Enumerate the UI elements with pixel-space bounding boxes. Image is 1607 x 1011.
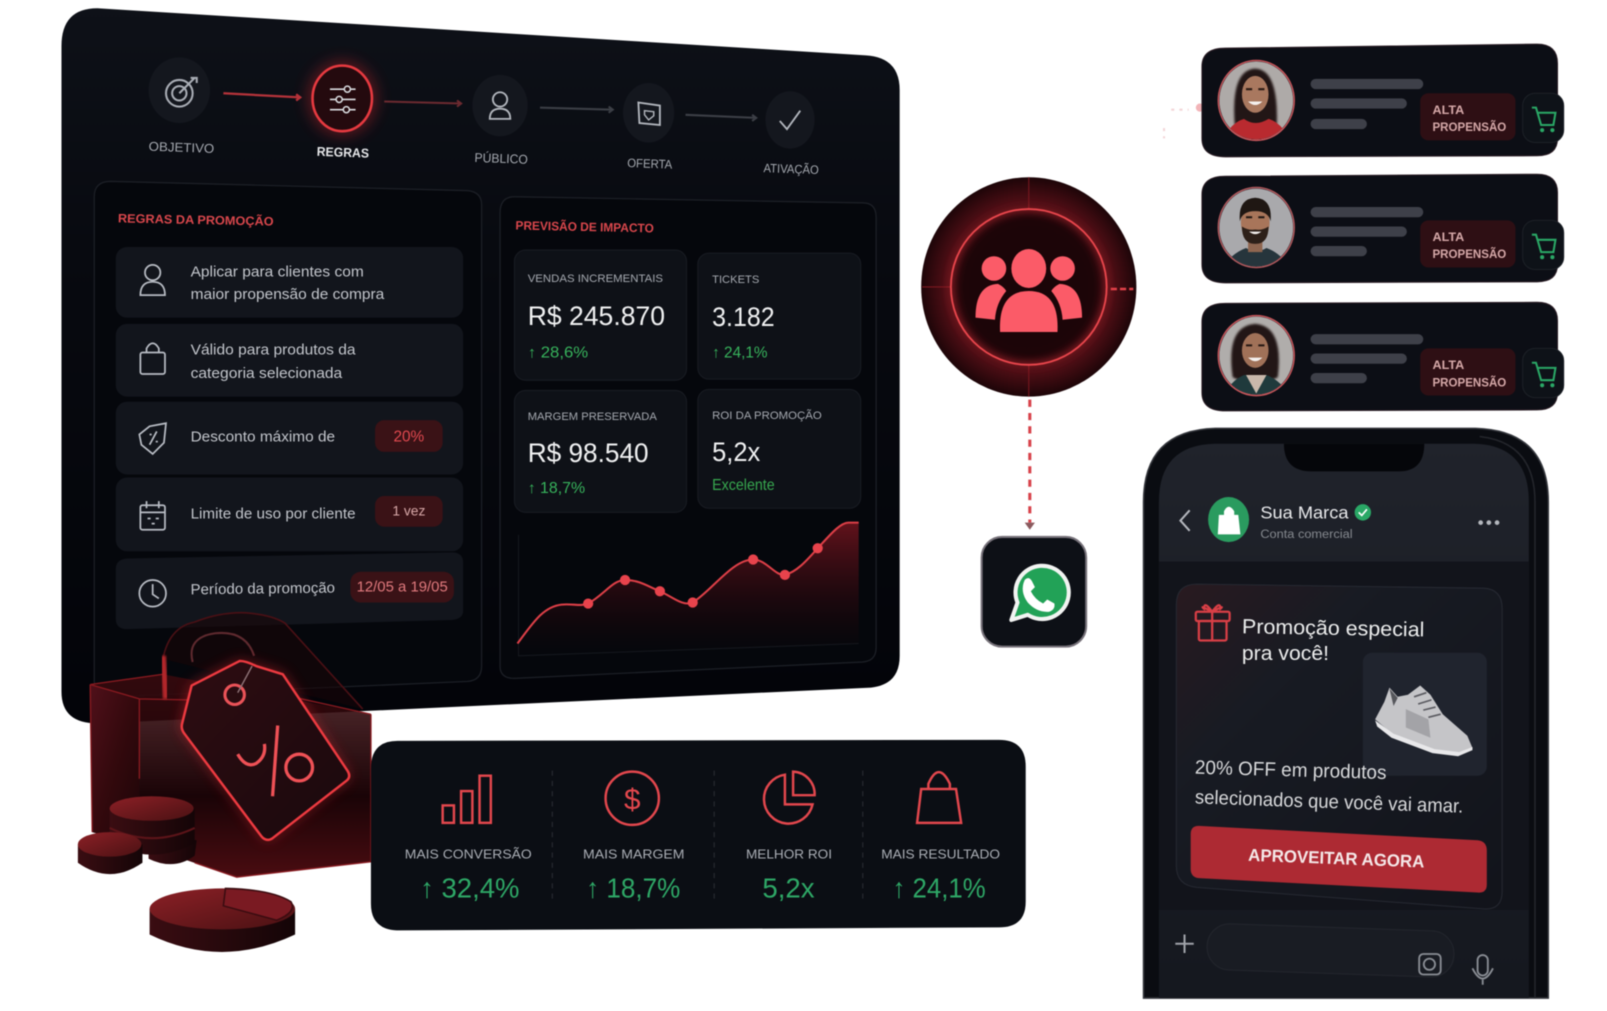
panel: regras da promoção <box>94 181 482 697</box>
avatar <box>1217 315 1295 400</box>
badge <box>1420 348 1515 396</box>
metric: roi da promoção <box>698 389 861 508</box>
stat: mais resultado: ↑ 24,1% <box>892 873 986 904</box>
heading: REGRAS DA PROMOÇÃO <box>118 210 274 229</box>
line chart <box>517 523 859 656</box>
stat: melhor roi: MELHOR ROI <box>746 847 832 862</box>
rule: desconto: 20% <box>393 429 425 446</box>
rule: desconto <box>116 402 463 474</box>
step: público <box>472 75 528 167</box>
step: ativação: ATIVAÇÃO <box>763 161 819 177</box>
metric: roi da promoção: ROI DA PROMOÇÃO <box>712 409 822 422</box>
metric: tickets: TICKETS <box>712 274 759 286</box>
metric: roi da promoção: 5,2x <box>712 437 761 467</box>
stat: mais conversão <box>405 776 532 904</box>
promo card: 20% OFF em produtos <box>1195 757 1387 784</box>
metric: vendas incrementais <box>514 250 687 380</box>
icon: cart <box>1523 348 1564 398</box>
customer card 3 <box>1202 302 1564 411</box>
pie chart token <box>150 888 295 952</box>
phone <box>1144 428 1548 998</box>
promo card: Promoção especial <box>1242 615 1425 641</box>
metric: vendas incrementais: R$ 245.870 <box>528 301 665 331</box>
step: oferta: OFERTA <box>627 156 673 172</box>
metric: roi da promoção: Excelente <box>712 477 775 494</box>
icon: whatsapp <box>982 537 1086 647</box>
metric: vendas incrementais: VENDAS INCREMENTAIS <box>528 273 663 285</box>
badge: PROPENSÃO <box>1432 119 1507 134</box>
connector <box>540 107 613 113</box>
chat header <box>1180 497 1499 542</box>
metric: margem preservada <box>514 390 687 512</box>
badge: ALTA <box>1432 103 1464 117</box>
step: objetivo <box>148 57 215 156</box>
input bar <box>1175 923 1493 985</box>
icon: cart <box>1523 220 1564 270</box>
stat: melhor roi: 5,2x <box>762 873 815 904</box>
rule: produtos: categoria selecionada <box>191 366 343 382</box>
metric: margem preservada: MARGEM PRESERVADA <box>528 411 657 423</box>
badge: ALTA <box>1432 358 1464 372</box>
stat: mais margem: MAIS MARGEM <box>583 847 684 862</box>
stat: mais margem: ↑ 18,7% <box>586 873 680 904</box>
stat: mais resultado: MAIS RESULTADO <box>881 847 1000 862</box>
metric: tickets: 3.182 <box>712 302 775 332</box>
rule: desconto: Desconto máximo de <box>191 430 335 446</box>
step: público: PÚBLICO <box>474 150 528 167</box>
chat header: Sua Marca <box>1260 503 1348 523</box>
metric: vendas incrementais: ↑ 28,6% <box>528 345 589 362</box>
icon: people <box>975 249 1082 332</box>
avatar <box>1217 59 1295 143</box>
results bar <box>371 740 1026 930</box>
dashboard tablet <box>61 8 900 723</box>
step flow <box>148 57 819 177</box>
stat: mais conversão: MAIS CONVERSÃO <box>405 847 532 862</box>
stat: mais conversão: ↑ 32,4% <box>420 873 520 904</box>
discount tag <box>181 661 349 840</box>
notch <box>1284 444 1424 471</box>
customer card 2 <box>1202 174 1564 283</box>
badge: PROPENSÃO <box>1432 246 1507 261</box>
avatar <box>1217 187 1295 271</box>
rule: produtos <box>116 324 463 397</box>
metric: tickets: ↑ 24,1% <box>712 345 768 362</box>
dashed arrow to WhatsApp <box>1025 400 1035 530</box>
badge <box>1420 93 1515 140</box>
rule: clientes <box>116 247 463 318</box>
metric: margem preservada: ↑ 18,7% <box>528 480 585 497</box>
panel: previsão de impacto <box>500 197 876 678</box>
rule: clientes: Aplicar para clientes com <box>191 265 364 281</box>
product image: sneaker <box>1363 653 1487 776</box>
step: regras: REGRAS <box>317 144 370 161</box>
step: objetivo: OBJETIVO <box>148 139 215 156</box>
rule: limite: Limite de uso por cliente <box>191 507 356 523</box>
connector <box>686 115 756 121</box>
step: regras <box>307 60 377 161</box>
badge: ALTA <box>1432 230 1464 244</box>
rule: período: Período da promoção <box>190 581 335 598</box>
chat header: Conta comercial <box>1260 527 1353 541</box>
stat: mais resultado <box>881 772 1000 904</box>
badge: PROPENSÃO <box>1432 374 1507 389</box>
customer link dots <box>1164 104 1204 138</box>
stat: mais margem <box>583 772 684 904</box>
rule: limite <box>116 478 463 551</box>
stat: mais margem: $ <box>624 784 641 817</box>
rule: limite: 1 vez <box>392 502 425 518</box>
step: ativação <box>763 91 819 177</box>
promo card <box>1176 584 1502 909</box>
step: oferta <box>623 83 674 172</box>
icon: gift <box>1196 605 1230 640</box>
coin stack <box>78 796 197 874</box>
button <box>1191 826 1487 893</box>
icon: cart <box>1523 93 1564 142</box>
badge <box>1420 220 1515 267</box>
rule: produtos: Válido para produtos da <box>191 343 356 359</box>
chat body <box>1159 562 1529 910</box>
button: APROVEITAR AGORA <box>1248 845 1425 872</box>
audience target circle <box>921 177 1136 397</box>
metric: tickets <box>698 253 861 379</box>
heading: PREVISÃO DE IMPACTO <box>515 218 654 235</box>
promo card: selecionados que você vai amar. <box>1195 786 1464 818</box>
connector <box>384 100 461 107</box>
3D shopping bag with discount tag and coins <box>78 613 371 952</box>
stat: melhor roi <box>746 772 832 904</box>
bag <box>90 613 371 877</box>
metric: margem preservada: R$ 98.540 <box>528 438 649 468</box>
customer card 1 <box>1202 44 1564 157</box>
connector <box>223 93 300 100</box>
rule: período <box>116 552 463 629</box>
rule: período: 12/05 a 19/05 <box>357 579 448 595</box>
promo card: pra você! <box>1242 642 1329 665</box>
rule: clientes: maior propensão de compra <box>191 287 385 303</box>
screen <box>1159 444 1529 998</box>
